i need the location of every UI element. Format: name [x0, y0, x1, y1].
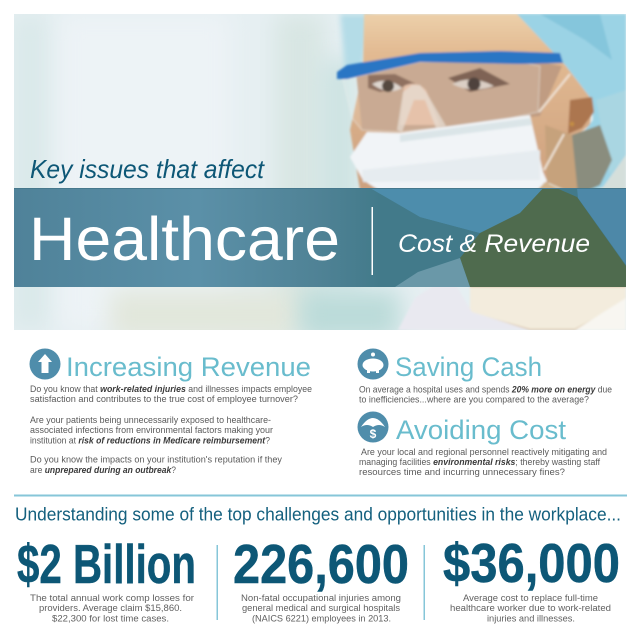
panel: avoiding cost — [358, 412, 607, 478]
hero divider — [372, 207, 373, 275]
caption — [450, 593, 611, 624]
panel: increasing revenue — [30, 348, 312, 476]
caption: $22,300 for lost time cases. — [52, 614, 169, 624]
icon: piggy bank — [358, 348, 388, 380]
caption — [241, 593, 401, 624]
text block: revenue questions: Are your patients being unnecessarily exposed to healthcare- — [30, 415, 271, 426]
text block: revenue questions: Do you know the impacts on your institution's reputation if they — [30, 454, 282, 466]
hero subtitle: Cost & Revenue — [398, 230, 590, 258]
text block: revenue questions: institution at risk of reductions in Medicare reimbursement? — [30, 436, 270, 446]
icon: up arrow — [30, 348, 60, 380]
caption: healthcare worker due to work-related — [450, 603, 611, 614]
caption: The total annual work comp losses for — [30, 593, 195, 604]
caption: Average cost to replace full-time — [463, 593, 598, 604]
caption: (NAICS 6221) employees in 2013. — [252, 614, 391, 624]
text block: environmental risks — [359, 447, 607, 478]
text block: revenue questions: satisfaction and contributes to the true cost of employee turnover? — [30, 394, 298, 405]
stat: 226,600 — [233, 533, 409, 624]
heading: avoiding cost: Avoiding Cost — [396, 415, 567, 445]
heading: saving cash: Saving Cash — [395, 352, 542, 382]
text block: revenue questions: are unprepared during an outbreak? — [30, 465, 176, 476]
number: 226,600 — [233, 533, 409, 595]
caption: general medical and surgical hospitals — [242, 603, 400, 614]
caption: Non-fatal occupational injuries among — [241, 593, 401, 604]
text block: energy spend: On average a hospital uses and spends 20% more on energy due — [359, 384, 612, 396]
icon: umbrella with dollar: $ — [370, 427, 377, 441]
text block: environmental risks: managing facilities environmental risks; thereby wasting staff — [359, 457, 600, 468]
text block: energy spend: to inefficiencies...where are you compared to the average? — [359, 394, 589, 406]
text block: energy spend — [359, 384, 612, 406]
text block: environmental risks: Are your local and regional personnel reactively mitigating and — [361, 447, 607, 458]
icon: umbrella with dollar — [358, 412, 388, 442]
hero title: Healthcare — [29, 205, 340, 273]
caption — [30, 593, 195, 624]
caption: providers. Average claim $15,860. — [39, 603, 182, 614]
number: $2 Billion — [17, 533, 196, 595]
text block: environmental risks: resources time and incurring unnecessary fines? — [359, 467, 565, 478]
caption: injuries and illnesses. — [487, 614, 575, 624]
heading: increasing revenue: Increasing Revenue — [66, 352, 311, 382]
panel: saving cash — [358, 348, 612, 406]
number: $36,000 — [443, 532, 620, 594]
stat: $36,000 — [443, 532, 620, 624]
text block: revenue questions: associated infections from environmental factors making your — [30, 425, 274, 436]
hero heading: Key issues that affect — [30, 154, 266, 184]
stat: $2 billion — [17, 533, 196, 624]
text block: revenue questions — [30, 384, 312, 476]
hero photo: healthcare worker in goggles and mask — [10, 14, 626, 340]
text block: revenue questions: Do you know that work-related injuries and illnesses impacts employee — [30, 384, 312, 395]
